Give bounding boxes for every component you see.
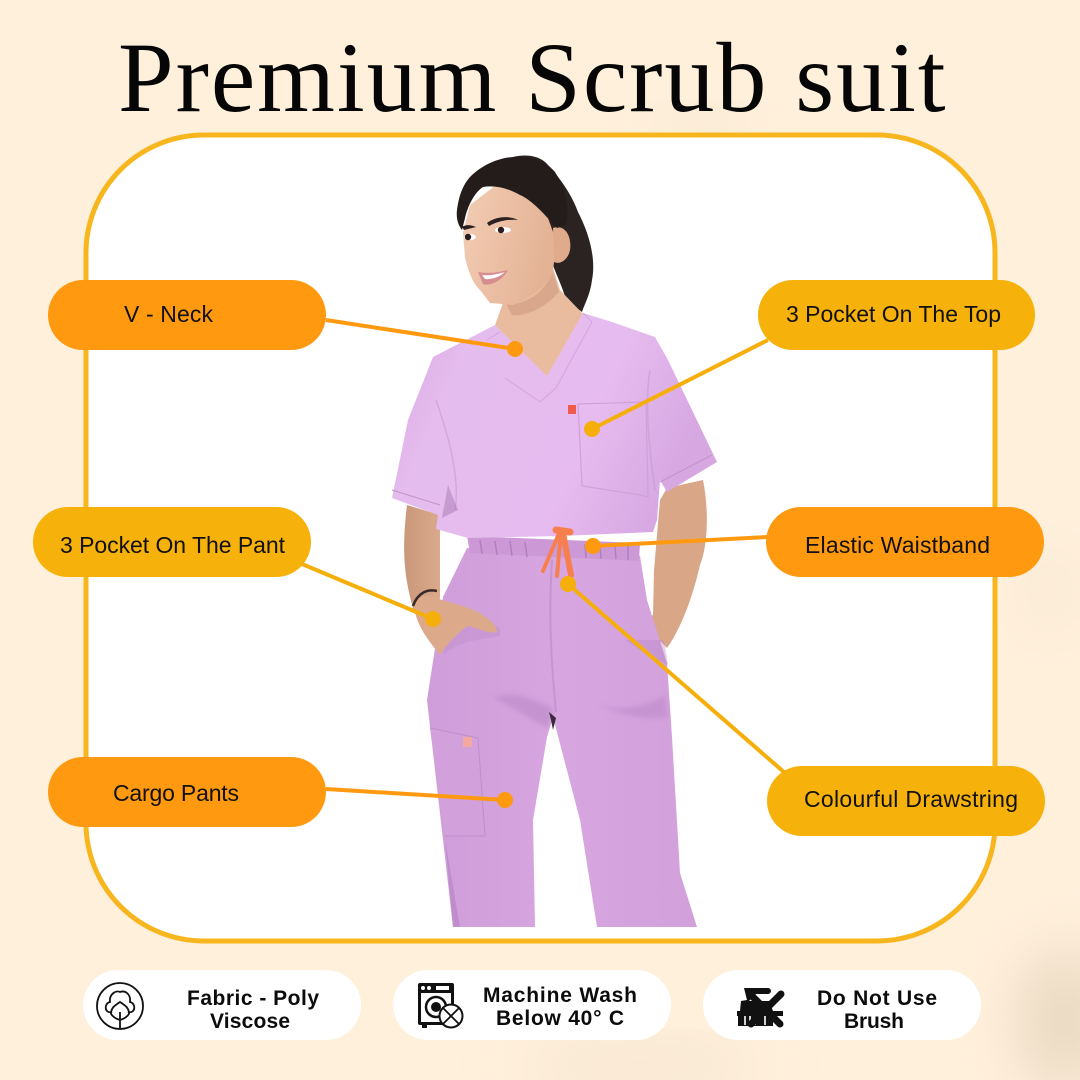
collar and pocket seams: [392, 313, 712, 518]
care badge: washing: Below 40° C: [496, 1007, 624, 1030]
neck: [495, 268, 583, 378]
mouth: [478, 270, 508, 285]
icon: cotton: [97, 983, 143, 1029]
face: [463, 182, 556, 305]
figure: woman wearing lilac scrub suit: [392, 156, 717, 927]
callout: V - Neck: [48, 280, 523, 357]
washing text: Machine Wash: [483, 984, 637, 1007]
trouser folds and cargo pocket: [430, 560, 668, 927]
callout: Colourful Drawstring: [560, 576, 1045, 836]
callout: V - Neck: V - Neck: [124, 301, 214, 327]
panel: product photo frame: [86, 135, 995, 941]
callout: Cargo Pants: Cargo Pants: [113, 780, 239, 806]
callout: Colourful Drawstring: Colourful Drawstring: [804, 786, 1018, 812]
callout: 3 Pocket On The Top: [584, 280, 1035, 437]
care badge: brush: Brush: [844, 1010, 904, 1033]
callout: 3 Pocket On The Pant: [33, 507, 441, 627]
care badge: brush: [703, 970, 981, 1040]
fabric text: Fabric - Poly: [187, 987, 319, 1010]
icon: crossed-out brush: [737, 988, 783, 1026]
right arm: [634, 480, 707, 648]
waistband: [467, 536, 640, 561]
brush text: Do Not Use: [817, 987, 937, 1010]
hair front: [457, 157, 567, 230]
care badge: fabric: Viscose: [210, 1010, 290, 1033]
left arm: [404, 505, 440, 620]
wristband: [413, 590, 437, 606]
left hand over pocket: [414, 596, 497, 655]
callout: 3 Pocket On The Pant: 3 Pocket On The Pant: [60, 532, 286, 558]
callout: Elastic Waistband: Elastic Waistband: [805, 532, 990, 558]
trousers: [427, 548, 697, 927]
drawstring: [543, 530, 571, 576]
callout: Elastic Waistband: [585, 507, 1044, 577]
callout: 3 Pocket On The Top: 3 Pocket On The Top: [786, 301, 1001, 327]
eyes and brows: [462, 217, 518, 240]
ponytail and back hair: [513, 156, 593, 312]
care badge: washing: [393, 970, 671, 1040]
icon: washing machine with cross: [418, 983, 462, 1028]
care badge: fabric: [83, 970, 361, 1040]
title: Premium Scrub suit: [118, 22, 948, 133]
ear: [553, 227, 570, 263]
scrub top: [392, 313, 717, 538]
callout: Cargo Pants: [48, 757, 513, 827]
